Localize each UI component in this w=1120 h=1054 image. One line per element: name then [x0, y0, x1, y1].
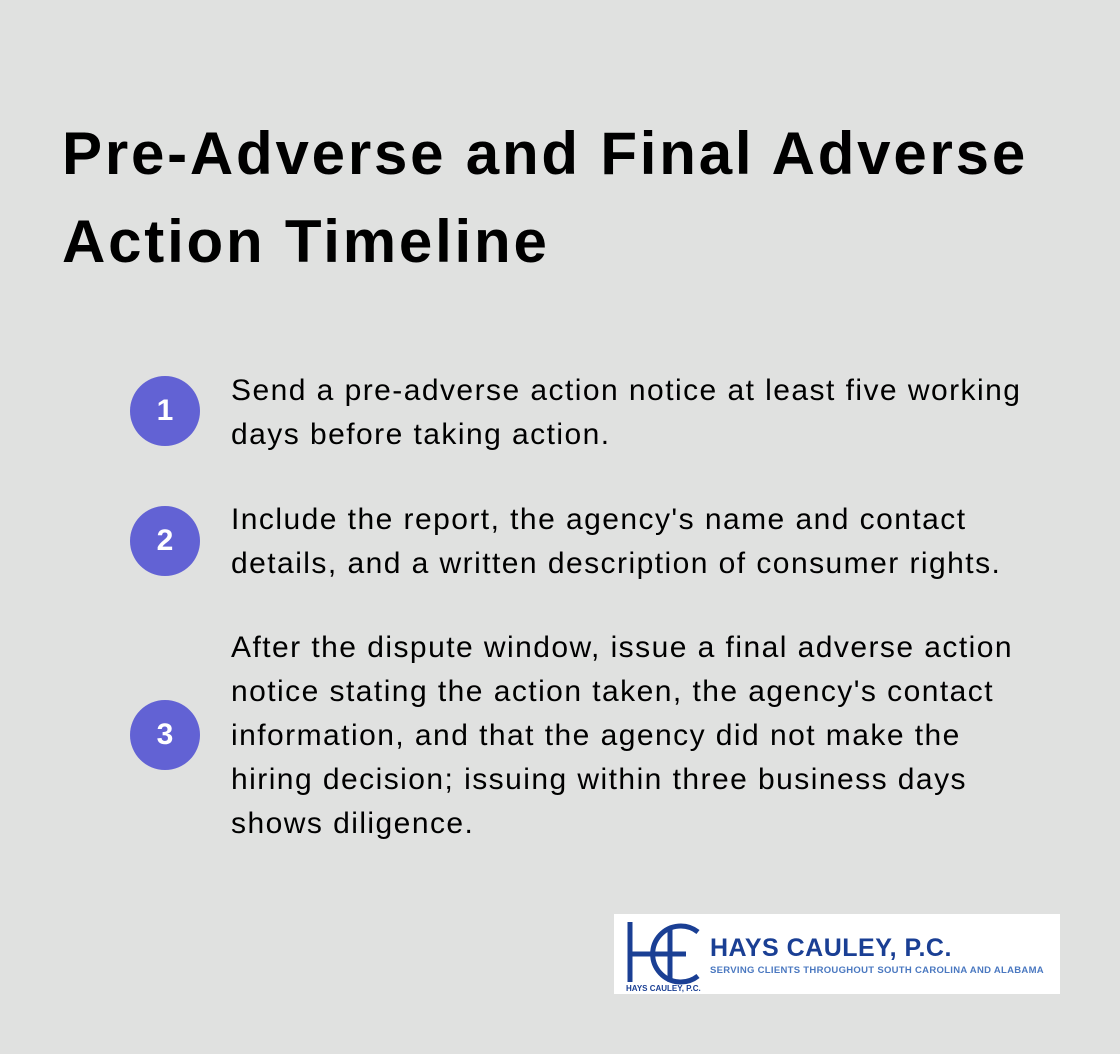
step 3 text: information, and that the agency did not make the [231, 719, 961, 752]
title: Action Timeline [62, 208, 550, 275]
step 2 number: 2 [157, 524, 173, 557]
step 3 number [130, 700, 200, 770]
step 1 text: Send a pre-adverse action notice at least five working [231, 374, 1021, 407]
step 1 number [130, 376, 200, 446]
title: Pre-Adverse and Final Adverse [62, 120, 1028, 187]
step 3 text: notice stating the action taken, the agency's contact [231, 675, 994, 708]
step 1 text: days before taking action. [231, 418, 611, 451]
title [62, 120, 1028, 275]
step 3 text: hiring decision; issuing within three business days [231, 763, 967, 796]
step 3 text: shows diligence. [231, 807, 474, 840]
step 2 text: Include the report, the agency's name and contact [231, 503, 967, 536]
logo mark [628, 922, 700, 984]
logo [614, 914, 1060, 994]
step 3 text: After the dispute window, issue a final adverse action [231, 631, 1013, 664]
step 2 number [130, 506, 200, 576]
step 1 text [231, 374, 1021, 451]
step 3 text [231, 631, 1013, 840]
step 1 number: 1 [157, 394, 173, 427]
step 3 number: 3 [157, 718, 173, 751]
logo small text: HAYS CAULEY, P.C. [626, 984, 701, 993]
step 2 text [231, 503, 1001, 580]
logo tagline: SERVING CLIENTS THROUGHOUT SOUTH CAROLINA AND ALABAMA [710, 965, 1044, 976]
logo name: HAYS CAULEY, P.C. [710, 934, 952, 962]
step 2 text: details, and a written description of consumer rights. [231, 547, 1001, 580]
